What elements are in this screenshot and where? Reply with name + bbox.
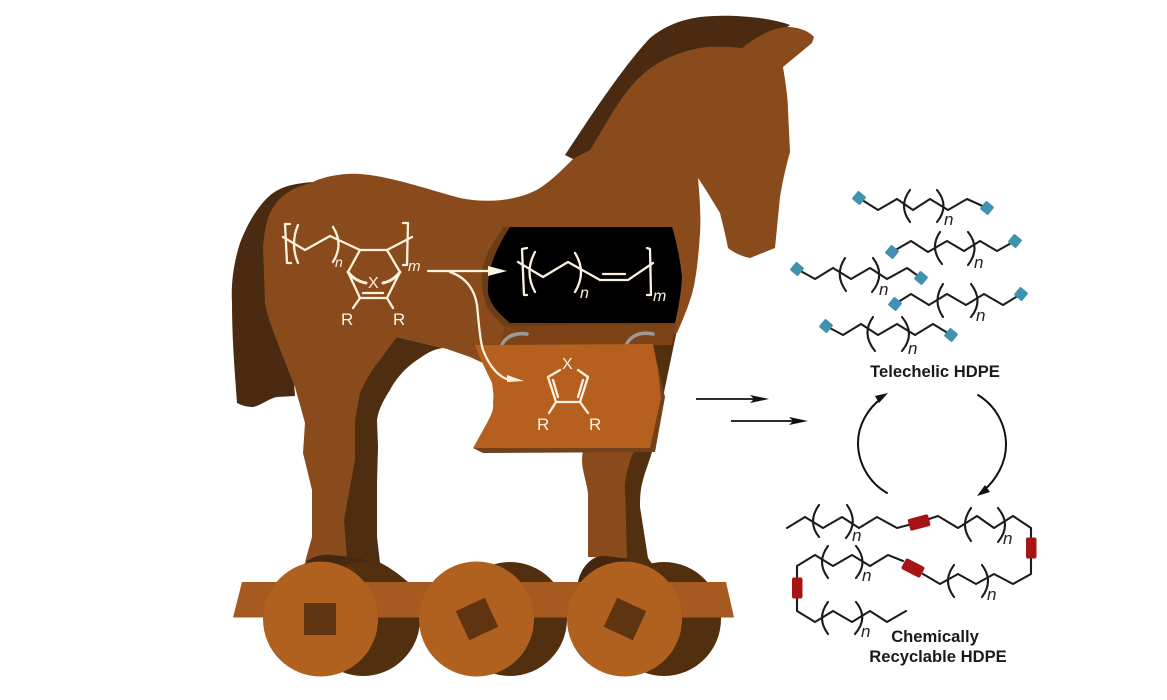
repeat labels: n <box>580 285 589 302</box>
open door panel <box>473 344 661 448</box>
arrow: upper reaction arrow <box>696 395 769 403</box>
labels: R <box>393 310 405 329</box>
trap door opening <box>473 227 682 453</box>
recyclable HDPE chain <box>787 505 1036 641</box>
atoms <box>537 356 601 434</box>
arrow: flank to released furan <box>450 272 524 382</box>
labels: m <box>408 258 420 275</box>
label: Telechelic HDPE: Telechelic HDPE <box>870 362 1000 381</box>
parentheses <box>813 505 1005 634</box>
open door side edge <box>473 344 665 453</box>
red cleavable linkages <box>792 515 1036 598</box>
labels: n <box>335 254 343 270</box>
front wheel right <box>567 562 682 676</box>
X bridge <box>348 272 400 283</box>
repeat labels: n <box>862 566 871 585</box>
hinge left <box>500 334 527 349</box>
repeat labels: n <box>1003 529 1012 548</box>
label: Chemically Recyclable HDPE: Chemically <box>891 627 980 646</box>
front wheel middle <box>419 562 534 676</box>
chain and brackets <box>518 248 653 295</box>
structure: released heterocycle on door <box>537 356 601 434</box>
lower frame strip <box>476 324 676 346</box>
chain 1 <box>853 190 993 229</box>
labels: X <box>368 275 379 292</box>
atoms: R <box>537 415 549 434</box>
label: Chemically Recyclable HDPE: Recyclable HDPE <box>869 647 1007 666</box>
labels: R <box>341 310 353 329</box>
backbone <box>283 223 412 265</box>
rear wheel shadows behind the beam <box>304 555 721 676</box>
front wheel left <box>263 562 378 676</box>
cycle arrow: upward <box>858 393 888 493</box>
structure: unsaturated polymer in opening <box>518 248 666 305</box>
chain 3: n <box>879 280 888 299</box>
chain 2: n <box>974 253 983 272</box>
door frame rim <box>482 227 675 328</box>
repeat labels: m <box>653 288 666 305</box>
structure: masked polymer on horse flank <box>283 223 420 329</box>
rear far leg <box>335 330 443 590</box>
illustration: Trojan horse <box>232 16 814 677</box>
arrow: lower reaction arrow <box>731 417 808 425</box>
chain 3 <box>791 258 927 299</box>
chain 4 <box>889 284 1027 325</box>
hinge right <box>625 333 653 348</box>
ring <box>548 370 588 413</box>
horse mane <box>565 16 790 159</box>
bicyclic ring <box>348 250 400 308</box>
repeat labels <box>580 285 666 305</box>
label: Chemically Recyclable HDPE <box>869 627 1007 666</box>
telechelic HDPE chains <box>791 190 1027 358</box>
horse tail <box>232 182 313 407</box>
atoms: X <box>562 356 573 373</box>
chain 4: n <box>976 306 985 325</box>
chain 5: n <box>908 339 917 358</box>
atoms: R <box>589 415 601 434</box>
repeat labels: n <box>852 526 861 545</box>
wooden platform beam <box>233 582 734 618</box>
repeat labels: n <box>987 585 996 604</box>
arrow: flank to polymer in opening <box>428 266 507 276</box>
chain 2 <box>886 232 1021 272</box>
labels <box>335 254 420 329</box>
repeat labels: n <box>861 622 870 641</box>
repeat labels <box>852 526 1012 641</box>
cycle arrow: downward <box>977 395 1006 496</box>
black interior <box>488 227 682 323</box>
chain 5 <box>820 317 957 358</box>
horse body and head <box>263 27 814 562</box>
zigzag backbone <box>787 516 1031 622</box>
front far leg and chest shadow <box>615 330 677 575</box>
chain 1: n <box>944 210 953 229</box>
